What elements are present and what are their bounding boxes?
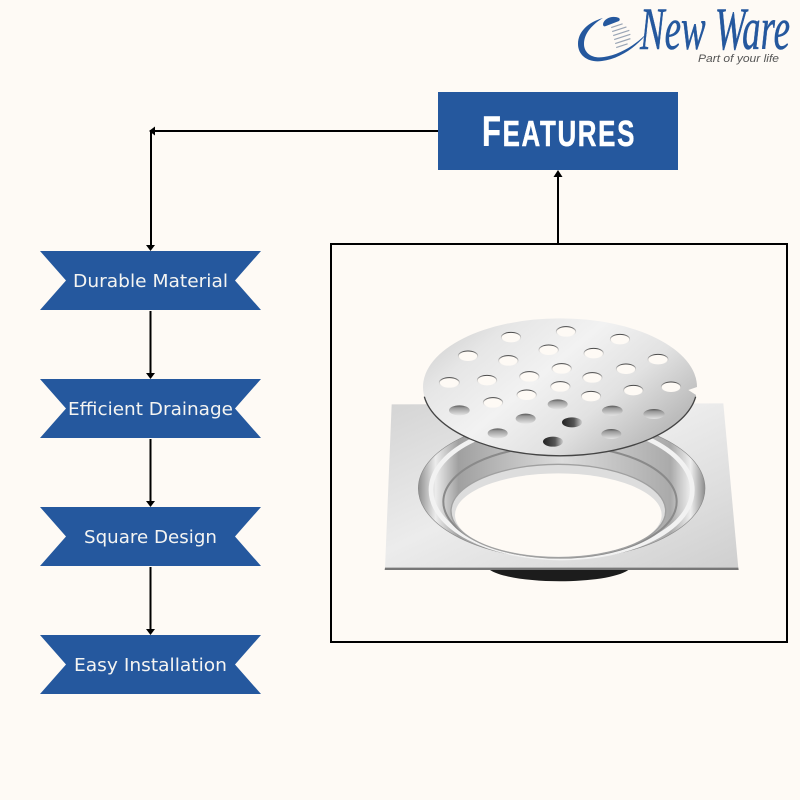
arrow: features to feature list [146, 126, 438, 251]
perforated cover plate [423, 318, 702, 456]
product image: square floor drain [385, 318, 739, 581]
ribbon: Efficient Drainage [40, 379, 261, 438]
drain pipe underside [490, 570, 628, 581]
arrow: image to features [554, 170, 562, 243]
ribbon: Square Design [40, 507, 261, 566]
logo tagline: Part of your life [698, 53, 779, 65]
ribbon: Durable Material: Durable Material [73, 271, 228, 292]
ribbon: Efficient Drainage: Efficient Drainage [68, 399, 233, 420]
ribbon: Easy Installation: Easy Installation [74, 655, 227, 676]
logo icon: shower swoosh [578, 17, 648, 61]
product image frame [331, 244, 787, 642]
recessed ring [418, 418, 705, 559]
logo: New Ware [578, 0, 790, 65]
heading box: Features [438, 92, 678, 170]
ribbon: Square Design: Square Design [84, 527, 217, 548]
arrow: Square Design to Easy Installation [146, 567, 155, 635]
arrow: Efficient Drainage to Square Design [146, 439, 155, 507]
arrow: Durable Material to Efficient Drainage [146, 311, 155, 379]
ribbon: Easy Installation [40, 635, 261, 694]
square base plate [385, 403, 739, 570]
heading text: FEATURES [482, 107, 636, 155]
ribbon: Durable Material [40, 251, 261, 310]
